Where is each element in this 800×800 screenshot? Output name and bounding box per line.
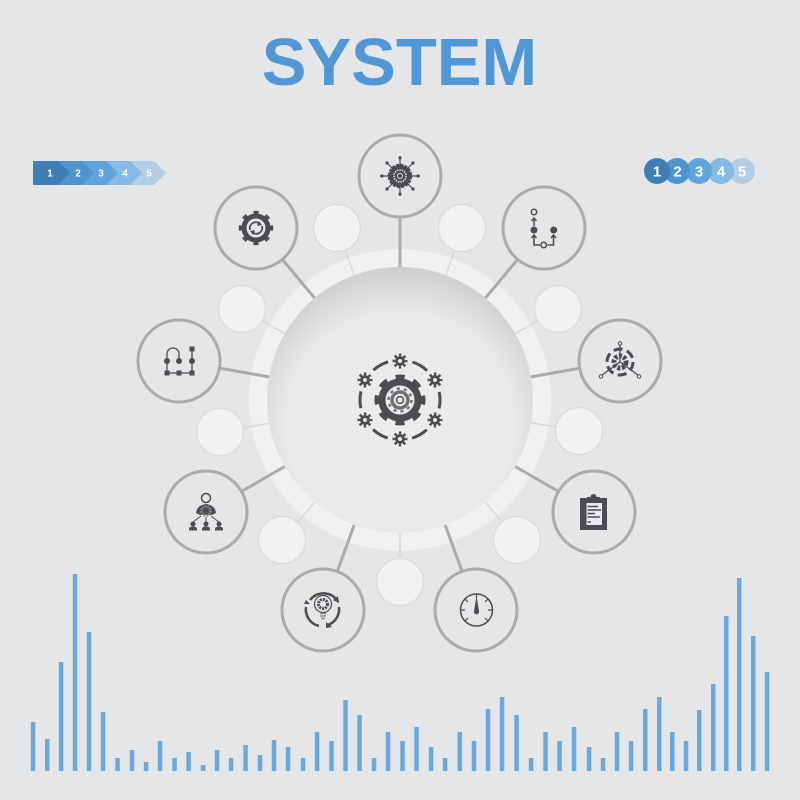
- icon: manager with gear and team: [189, 494, 223, 530]
- numbered circles 1 to 5: 5: [738, 164, 746, 180]
- numbered circles 1 to 5: 4: [717, 164, 726, 180]
- step arrows 1 to 5: 2: [75, 168, 81, 180]
- icon: bulb with gear and cycle arrows: [304, 593, 339, 628]
- step arrows 1 to 5: 5: [146, 168, 152, 180]
- connector lines to small circles: [244, 250, 556, 558]
- icon: speedometer gauge: [460, 594, 492, 626]
- numbered circles 1 to 5: 3: [695, 164, 703, 180]
- numbered circles 1 to 5: [644, 158, 755, 184]
- panel: icon circle process loop: [138, 320, 220, 402]
- panel: icon circle tri-node gears: [579, 320, 661, 402]
- central disc: [267, 267, 533, 533]
- title: SYSTEM: [262, 25, 537, 100]
- icon: gear with radiating nodes: [380, 156, 420, 196]
- step arrows 1 to 5: 4: [122, 168, 128, 180]
- bar chart: [31, 574, 769, 771]
- panel: icon circle clipboard: [553, 471, 635, 553]
- panel: icon circle gauge: [435, 569, 517, 651]
- numbered circles 1 to 5: 2: [673, 164, 682, 180]
- step arrows 1 to 5: 1: [47, 168, 53, 180]
- connector lines to icon circles: [219, 217, 580, 572]
- icon: flow nodes and arrows: [530, 209, 557, 248]
- panel: icon circle gear network: [359, 135, 441, 217]
- small empty circles: [196, 204, 602, 606]
- icon: clipboard: [580, 494, 607, 530]
- panel: icon circle gear refresh: [215, 187, 297, 269]
- icon: gear with refresh arrows: [240, 212, 272, 244]
- panel: icon circle light bulb: [282, 569, 364, 651]
- icon: process loop diagram: [164, 346, 195, 376]
- icon: central gears: [359, 355, 441, 445]
- panel: icon circle hierarchy: [165, 471, 247, 553]
- light outer ring: [249, 249, 551, 551]
- panel: icon circle flowchart: [503, 187, 585, 269]
- step arrows 1 to 5: 3: [98, 168, 104, 180]
- icon: circular gears with three nodes: [599, 342, 641, 378]
- step arrows 1 to 5: [33, 161, 166, 185]
- numbered circles 1 to 5: 1: [653, 164, 661, 180]
